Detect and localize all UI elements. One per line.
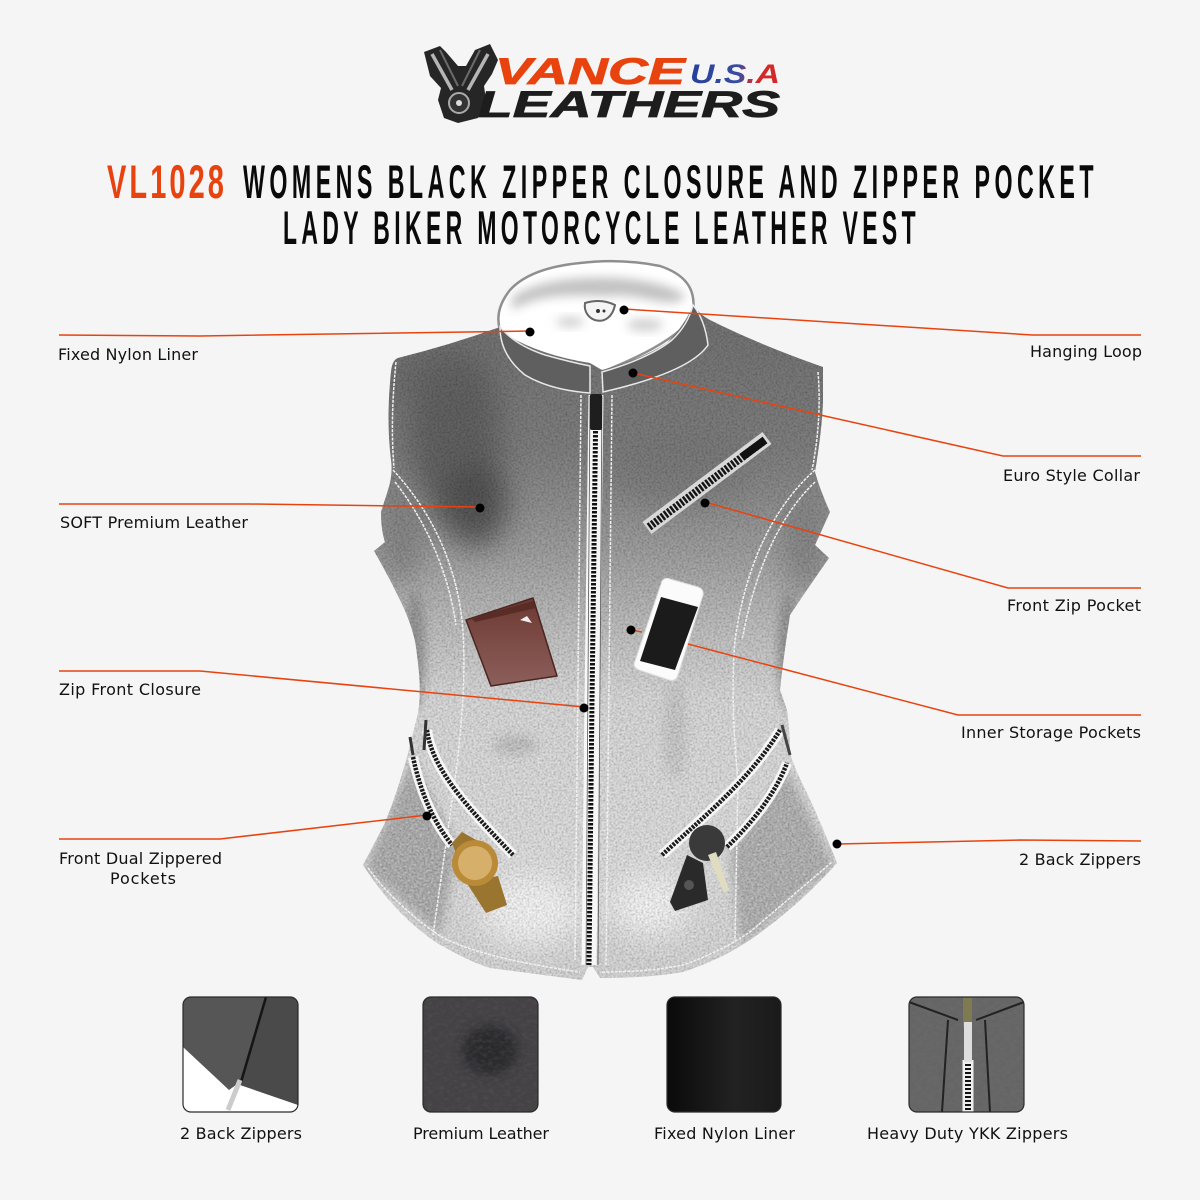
thumbnail: ykk zipper <box>909 997 1024 1112</box>
euro collar band <box>500 305 708 393</box>
feature: 2 back zippers <box>180 997 302 1143</box>
callout: front zip pocket <box>700 498 1141 615</box>
callout: zip front closure <box>59 671 588 712</box>
icon: gold watch <box>452 832 507 913</box>
title: VL1028 <box>107 155 227 208</box>
callout: inner storage pockets <box>626 626 1141 742</box>
chest zip pocket <box>647 438 767 528</box>
callout: hanging loop: Hanging Loop <box>1030 342 1142 361</box>
icon: smartphone <box>634 578 703 680</box>
thumbnail: leather texture <box>423 997 538 1112</box>
callout: euro style collar: Euro Style Collar <box>1003 466 1140 485</box>
vest body <box>363 305 837 980</box>
callout: soft premium leather <box>59 504 484 532</box>
stitching <box>368 362 832 972</box>
callout: front zip pocket: Front Zip Pocket <box>1007 596 1141 615</box>
feature: 2 back zippers: 2 Back Zippers <box>180 1124 302 1143</box>
feature: heavy duty ykk zippers <box>867 997 1068 1143</box>
lower left zip pockets <box>410 720 513 855</box>
callout: 2 back zippers <box>832 840 1141 869</box>
callout: 2 back zippers: 2 Back Zippers <box>1019 850 1141 869</box>
logo wordmark: Vance: VANCE <box>495 51 687 92</box>
logo wordmark: Leathers: LEATHERS <box>478 84 780 125</box>
feature: fixed nylon liner <box>654 997 795 1143</box>
callout: zip front closure: Zip Front Closure <box>59 680 201 699</box>
icon: v-twin engine <box>424 44 498 123</box>
leather vest <box>363 260 837 980</box>
callout: euro style collar <box>628 368 1141 485</box>
feature: premium leather: Premium Leather <box>413 1124 549 1143</box>
collar lining <box>498 261 694 372</box>
callout: front dual zippered pockets <box>59 812 432 888</box>
callout: fixed nylon liner: Fixed Nylon Liner <box>58 345 198 364</box>
callout: hanging loop <box>620 306 1142 361</box>
logo <box>424 44 780 125</box>
icon: car keys <box>670 825 729 911</box>
icon: wallet <box>466 598 557 686</box>
callout: inner storage pockets: Inner Storage Pockets <box>961 723 1141 742</box>
thumbnail: nylon <box>667 997 781 1112</box>
callout: front dual zippered pockets: Pockets <box>110 869 176 888</box>
title <box>107 155 1098 254</box>
center zipper: zip front closure <box>586 394 602 965</box>
leather shading <box>340 300 860 1000</box>
feature: heavy duty ykk zippers: Heavy Duty YKK Zippers <box>867 1124 1068 1143</box>
feature: premium leather <box>413 997 549 1143</box>
callout: soft premium leather: SOFT Premium Leather <box>60 513 248 532</box>
thumbnail: back zipper <box>183 997 298 1112</box>
lower right zip pockets <box>662 725 790 855</box>
hanging loop <box>585 301 615 321</box>
feature: fixed nylon liner: Fixed Nylon Liner <box>654 1124 795 1143</box>
callout: fixed nylon liner <box>58 328 534 364</box>
callout: front dual zippered pockets: Front Dual Zippered <box>59 849 222 868</box>
logo: USA: U.S.A <box>690 59 780 89</box>
